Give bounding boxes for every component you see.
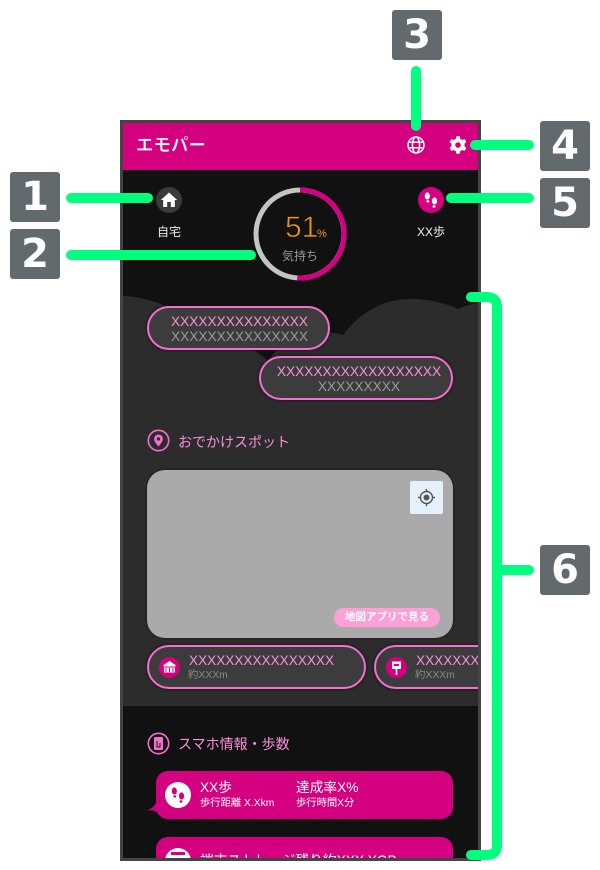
icon: phone bbox=[148, 732, 170, 754]
step count: XX歩 bbox=[200, 780, 232, 795]
spot distance: 約XXXm bbox=[188, 670, 228, 681]
mood label: 気持ち bbox=[282, 249, 318, 263]
badge 5: 5 bbox=[551, 180, 579, 226]
speech bubble 1 bbox=[147, 306, 330, 350]
header bar bbox=[123, 123, 478, 170]
badge 5 bbox=[540, 178, 590, 228]
map app button bbox=[334, 608, 440, 627]
mood percent bbox=[285, 211, 327, 244]
mood gauge bbox=[254, 188, 347, 280]
badge 1 bbox=[10, 172, 60, 222]
callout bracket 6 bbox=[466, 292, 534, 860]
badge 6: 6 bbox=[551, 547, 579, 593]
callout line 1 bbox=[66, 193, 153, 203]
callout line 5 bbox=[446, 193, 534, 203]
icon: globe bbox=[407, 136, 425, 154]
spot distance: 約XXXm bbox=[415, 670, 455, 681]
badge 1: 1 bbox=[21, 174, 49, 220]
callout line 3 bbox=[411, 66, 421, 131]
icon: map pin bbox=[148, 430, 170, 452]
badge 3 bbox=[392, 10, 442, 60]
icon: footprints bbox=[418, 187, 444, 213]
speech bubble 2 bbox=[259, 356, 453, 400]
icon: gear bbox=[450, 136, 466, 154]
speech bubble 1: XXXXXXXXXXXXXXX bbox=[171, 329, 308, 344]
steps label: XX歩 bbox=[417, 225, 445, 239]
percent sign: % bbox=[317, 228, 327, 240]
spot name: XXXXXXXXXXXXXXXX bbox=[189, 653, 334, 668]
walking distance: 歩行距離 X.Xkm bbox=[200, 798, 274, 809]
badge 2 bbox=[10, 229, 60, 279]
section heading: phone info and steps bbox=[148, 732, 290, 754]
icon: storage bbox=[165, 848, 191, 858]
badge 4 bbox=[540, 121, 590, 171]
gauge ring bbox=[254, 188, 347, 280]
badge 4: 4 bbox=[551, 123, 579, 169]
heading text: スマホ情報・歩数 bbox=[178, 736, 290, 752]
icon: signpost bbox=[386, 657, 407, 678]
phone screen bbox=[120, 120, 481, 861]
percent value: 51 bbox=[285, 211, 318, 244]
callout line 4 bbox=[470, 140, 534, 150]
walking time: 歩行時間X分 bbox=[296, 798, 354, 809]
heading text: おでかけスポット bbox=[178, 434, 290, 450]
map panel bbox=[147, 470, 453, 638]
card body bbox=[156, 771, 453, 819]
badge 3: 3 bbox=[403, 12, 431, 58]
achievement rate: 達成率X% bbox=[296, 780, 358, 795]
steps button bbox=[417, 187, 445, 239]
icon: locate button bbox=[410, 481, 443, 514]
map app button: 地図アプリで見る bbox=[345, 611, 429, 623]
speech bubble 1: XXXXXXXXXXXXXXX bbox=[171, 314, 308, 329]
callout line 2 bbox=[66, 250, 256, 260]
badge 6 bbox=[540, 545, 590, 595]
spot card 2 bbox=[374, 645, 514, 689]
section heading: outing spots bbox=[148, 430, 290, 452]
steps card bbox=[148, 771, 453, 819]
spot card 1 bbox=[147, 645, 366, 689]
card tail bbox=[148, 803, 158, 813]
home label: 自宅 bbox=[157, 225, 181, 239]
speech bubble 2: XXXXXXXXXXXXXXXXXX bbox=[277, 364, 441, 379]
storage card bbox=[156, 837, 453, 870]
badge 2: 2 bbox=[21, 231, 49, 277]
icon: building bbox=[159, 657, 180, 678]
home button bbox=[156, 187, 182, 239]
cloud background panel bbox=[123, 296, 478, 706]
icon: footprints bbox=[165, 782, 191, 808]
app title: エモパー bbox=[136, 135, 206, 155]
speech bubble 2: XXXXXXXXX bbox=[318, 379, 400, 394]
icon: home bbox=[156, 187, 182, 213]
